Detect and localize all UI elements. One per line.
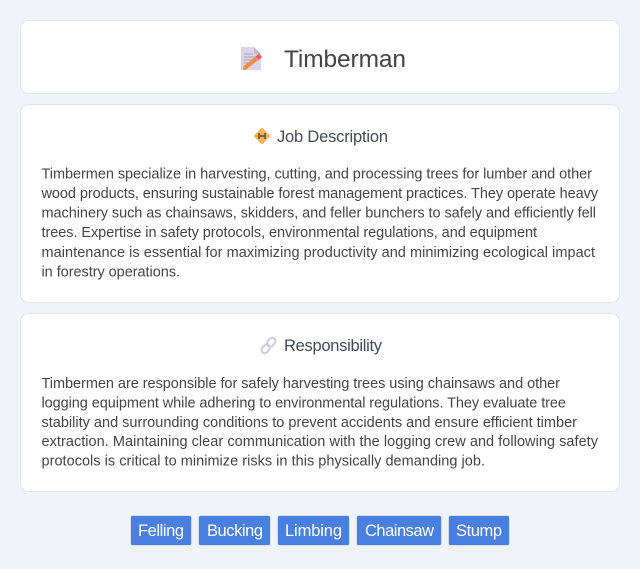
tag: Chainsaw [356, 516, 442, 546]
tag: Bucking [198, 516, 270, 546]
text block: responsibility body: extraction. Maintaining clear communication with the logging crew and following safety [42, 434, 599, 450]
tag: Felling: Felling [138, 522, 184, 540]
tag: Felling [130, 516, 192, 546]
text block: job description body: trees. Expertise in safety protocols, environmental regulations, and equipment [42, 225, 537, 241]
text block: job description body: maintenance is essential for maximizing productivity and minimizing ecological impact [42, 245, 595, 261]
tag: Limbing [278, 516, 350, 546]
text block: job description body: Timbermen specialize in harvesting, cutting, and processing trees for lumber and other [42, 166, 592, 182]
tag: Chainsaw: Chainsaw [365, 522, 434, 540]
text block: job description body: machinery such as chainsaws, skidders, and feller bunchers to safely and efficiently fell [42, 206, 596, 222]
heading: responsibility: Responsibility [284, 337, 383, 355]
text block: job description body [40, 166, 599, 280]
tag: Stump [448, 516, 510, 546]
text block: responsibility body: stability and surrounding conditions to prevent accidents and ensure efficient timber [42, 415, 577, 431]
tag row [130, 516, 510, 546]
panel: job description [20, 104, 620, 302]
icon: chain link [260, 337, 277, 354]
heading: job description: Job Description [277, 128, 388, 146]
title text: Timberman [284, 46, 406, 73]
text block: responsibility body: Timbermen are responsible for safely harvesting trees using chainsaws and other [42, 376, 560, 392]
text block: responsibility body: protocols is critical to minimize risks in this physically demanding job. [42, 454, 485, 470]
panel: title card [20, 20, 620, 94]
text block: job description body: wood products, ensuring sustainable forest management practices. They operate heavy [40, 186, 599, 202]
tag: Stump: Stump [456, 522, 502, 540]
text block: responsibility body: logging equipment while adhering to environmental regulations. They evaluate tree [42, 396, 566, 412]
tag: Limbing: Limbing [285, 522, 342, 540]
tag: Bucking: Bucking [207, 522, 263, 540]
icon: document with pencil [241, 47, 262, 70]
icon: diamond sign [254, 128, 270, 144]
text block: job description body: in forestry operations. [42, 264, 180, 280]
panel: responsibility [20, 314, 620, 492]
text block: responsibility body [42, 376, 599, 470]
